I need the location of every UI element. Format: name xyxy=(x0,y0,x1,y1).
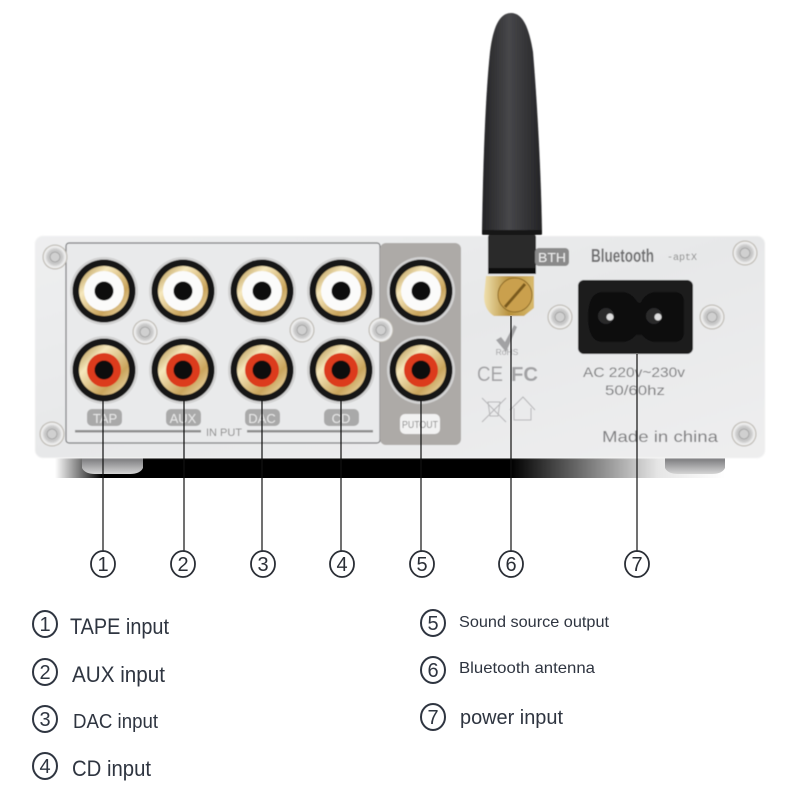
made in china: Made in china xyxy=(602,429,718,446)
legend item 4: 4 xyxy=(39,756,51,778)
jack tags xyxy=(87,409,440,434)
antenna connector xyxy=(484,276,534,316)
callout numbers: 1 xyxy=(97,554,109,576)
input section frame xyxy=(66,243,380,443)
output section xyxy=(380,243,461,445)
legend: left column xyxy=(33,611,169,781)
legend item 6 xyxy=(421,657,595,683)
leader lines xyxy=(103,316,637,552)
power rating: AC 220v~230v xyxy=(583,364,685,380)
legend item 3: 3 xyxy=(39,709,51,731)
jack tags: PUTOUT xyxy=(402,420,438,431)
jack tags: AUX xyxy=(170,411,197,426)
legend item 2 xyxy=(33,659,165,687)
legend item 3 xyxy=(33,706,158,733)
Bluetooth heading: Bluetooth xyxy=(591,246,654,266)
legend item 2: AUX input xyxy=(72,662,165,687)
legend item 5: 5 xyxy=(427,613,439,635)
compliance marks: RoHS xyxy=(496,347,519,357)
jack tags: TAP xyxy=(93,411,117,426)
aptX label: -aptX xyxy=(667,253,697,264)
callout numbers: 2 xyxy=(177,554,189,576)
RCA jacks: bottom row xyxy=(70,336,455,404)
device rear panel xyxy=(35,13,765,458)
power rating: 50/60hz xyxy=(605,382,665,398)
callout numbers: 3 xyxy=(257,554,269,576)
compliance marks: FC xyxy=(511,364,538,386)
legend item 7: 7 xyxy=(427,707,439,729)
compliance marks xyxy=(477,325,538,422)
power socket xyxy=(578,280,693,354)
floor shadow xyxy=(55,458,725,478)
legend item 1 xyxy=(33,611,169,639)
legend item 4 xyxy=(33,753,151,781)
callout numbers: 7 xyxy=(631,554,643,576)
BTH badge xyxy=(535,248,569,266)
RCA jacks: top row xyxy=(70,257,455,325)
power rating xyxy=(583,364,685,398)
input rule and label: IN PUT xyxy=(206,427,242,439)
legend item 5 xyxy=(421,610,610,636)
callout numbers xyxy=(91,551,649,577)
legend item 1: TAPE input xyxy=(70,614,169,639)
compliance marks: CE xyxy=(477,363,503,386)
screws xyxy=(40,240,758,446)
legend item 4: CD input xyxy=(72,756,151,781)
callout numbers: 4 xyxy=(336,554,348,576)
legend item 3: DAC input xyxy=(73,711,158,733)
foot: left xyxy=(82,458,143,474)
legend item 6: 6 xyxy=(427,660,439,682)
antenna xyxy=(482,13,542,316)
callout numbers: 5 xyxy=(416,554,428,576)
foot: right xyxy=(665,458,725,474)
legend item 5: Sound source output xyxy=(459,614,610,631)
legend item 6: Bluetooth antenna xyxy=(459,660,595,677)
callout numbers: 6 xyxy=(505,554,517,576)
jack tags: DAC xyxy=(248,411,276,426)
legend item 7: power input xyxy=(460,707,563,729)
BTH badge: BTH xyxy=(538,250,566,265)
legend item 1: 1 xyxy=(39,614,51,636)
jack tags: CD xyxy=(332,411,350,426)
legend item 7 xyxy=(421,704,563,730)
legend item 2: 2 xyxy=(39,662,51,684)
legend: right column xyxy=(421,610,610,730)
